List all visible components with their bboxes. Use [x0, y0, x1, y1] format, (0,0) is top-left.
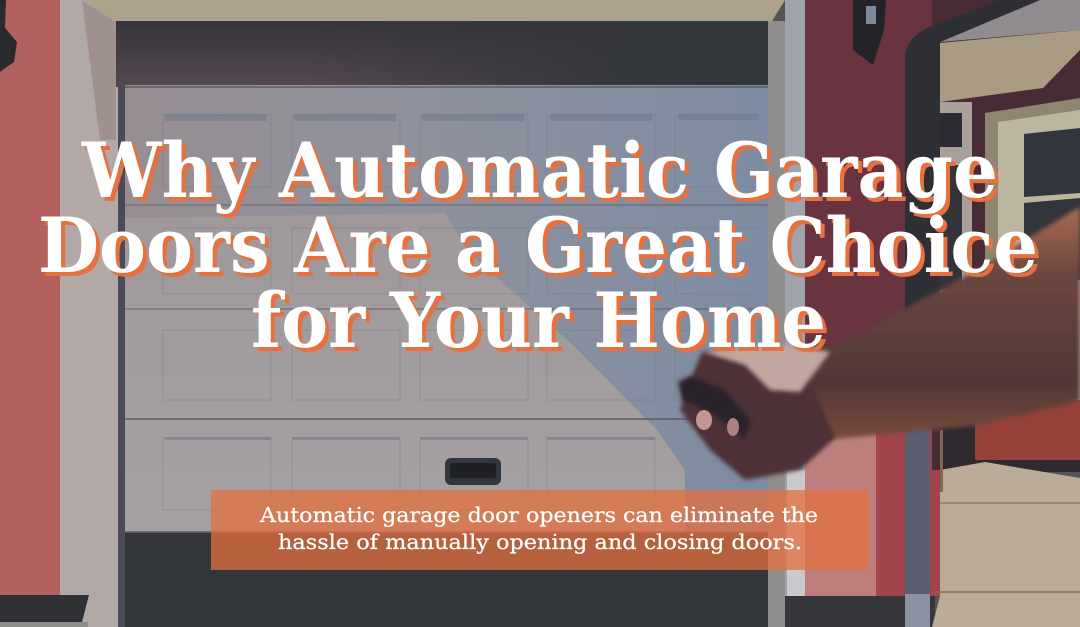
neighbouring porch: [932, 0, 1080, 470]
title: [38, 126, 1038, 365]
dark gap below door: [125, 533, 770, 627]
top soffit: [84, 0, 785, 21]
dark roof edge and pipe: [905, 0, 1040, 315]
caption text: [259, 503, 818, 554]
caption text: hassle of manually opening and closing doors.: [278, 530, 802, 554]
opening above door: [116, 21, 770, 87]
right wall lower: [785, 420, 940, 627]
left door trim: [60, 0, 125, 627]
caption text: Automatic garage door openers can eliminate the: [259, 503, 818, 527]
door joints: [125, 87, 768, 532]
downpipe: [905, 420, 930, 627]
porch ground: [932, 400, 1080, 627]
garage door: [125, 85, 768, 532]
wall lantern left: [0, 0, 17, 72]
caption box: [211, 490, 869, 570]
dark plinth left: [0, 595, 89, 627]
left wall: [0, 0, 64, 600]
title: Why Automatic Garage: [81, 126, 998, 215]
right door trim: [768, 0, 805, 627]
door panels: [163, 115, 760, 510]
remote: [678, 376, 750, 440]
title: for Your Home: [251, 276, 826, 365]
door handle: [445, 458, 501, 485]
sunlit area: [125, 213, 685, 532]
right wall upper: [805, 0, 940, 440]
panel shadow strips: [165, 114, 758, 440]
lantern right: [853, 0, 886, 65]
arm and hand holding remote: [678, 207, 1080, 480]
